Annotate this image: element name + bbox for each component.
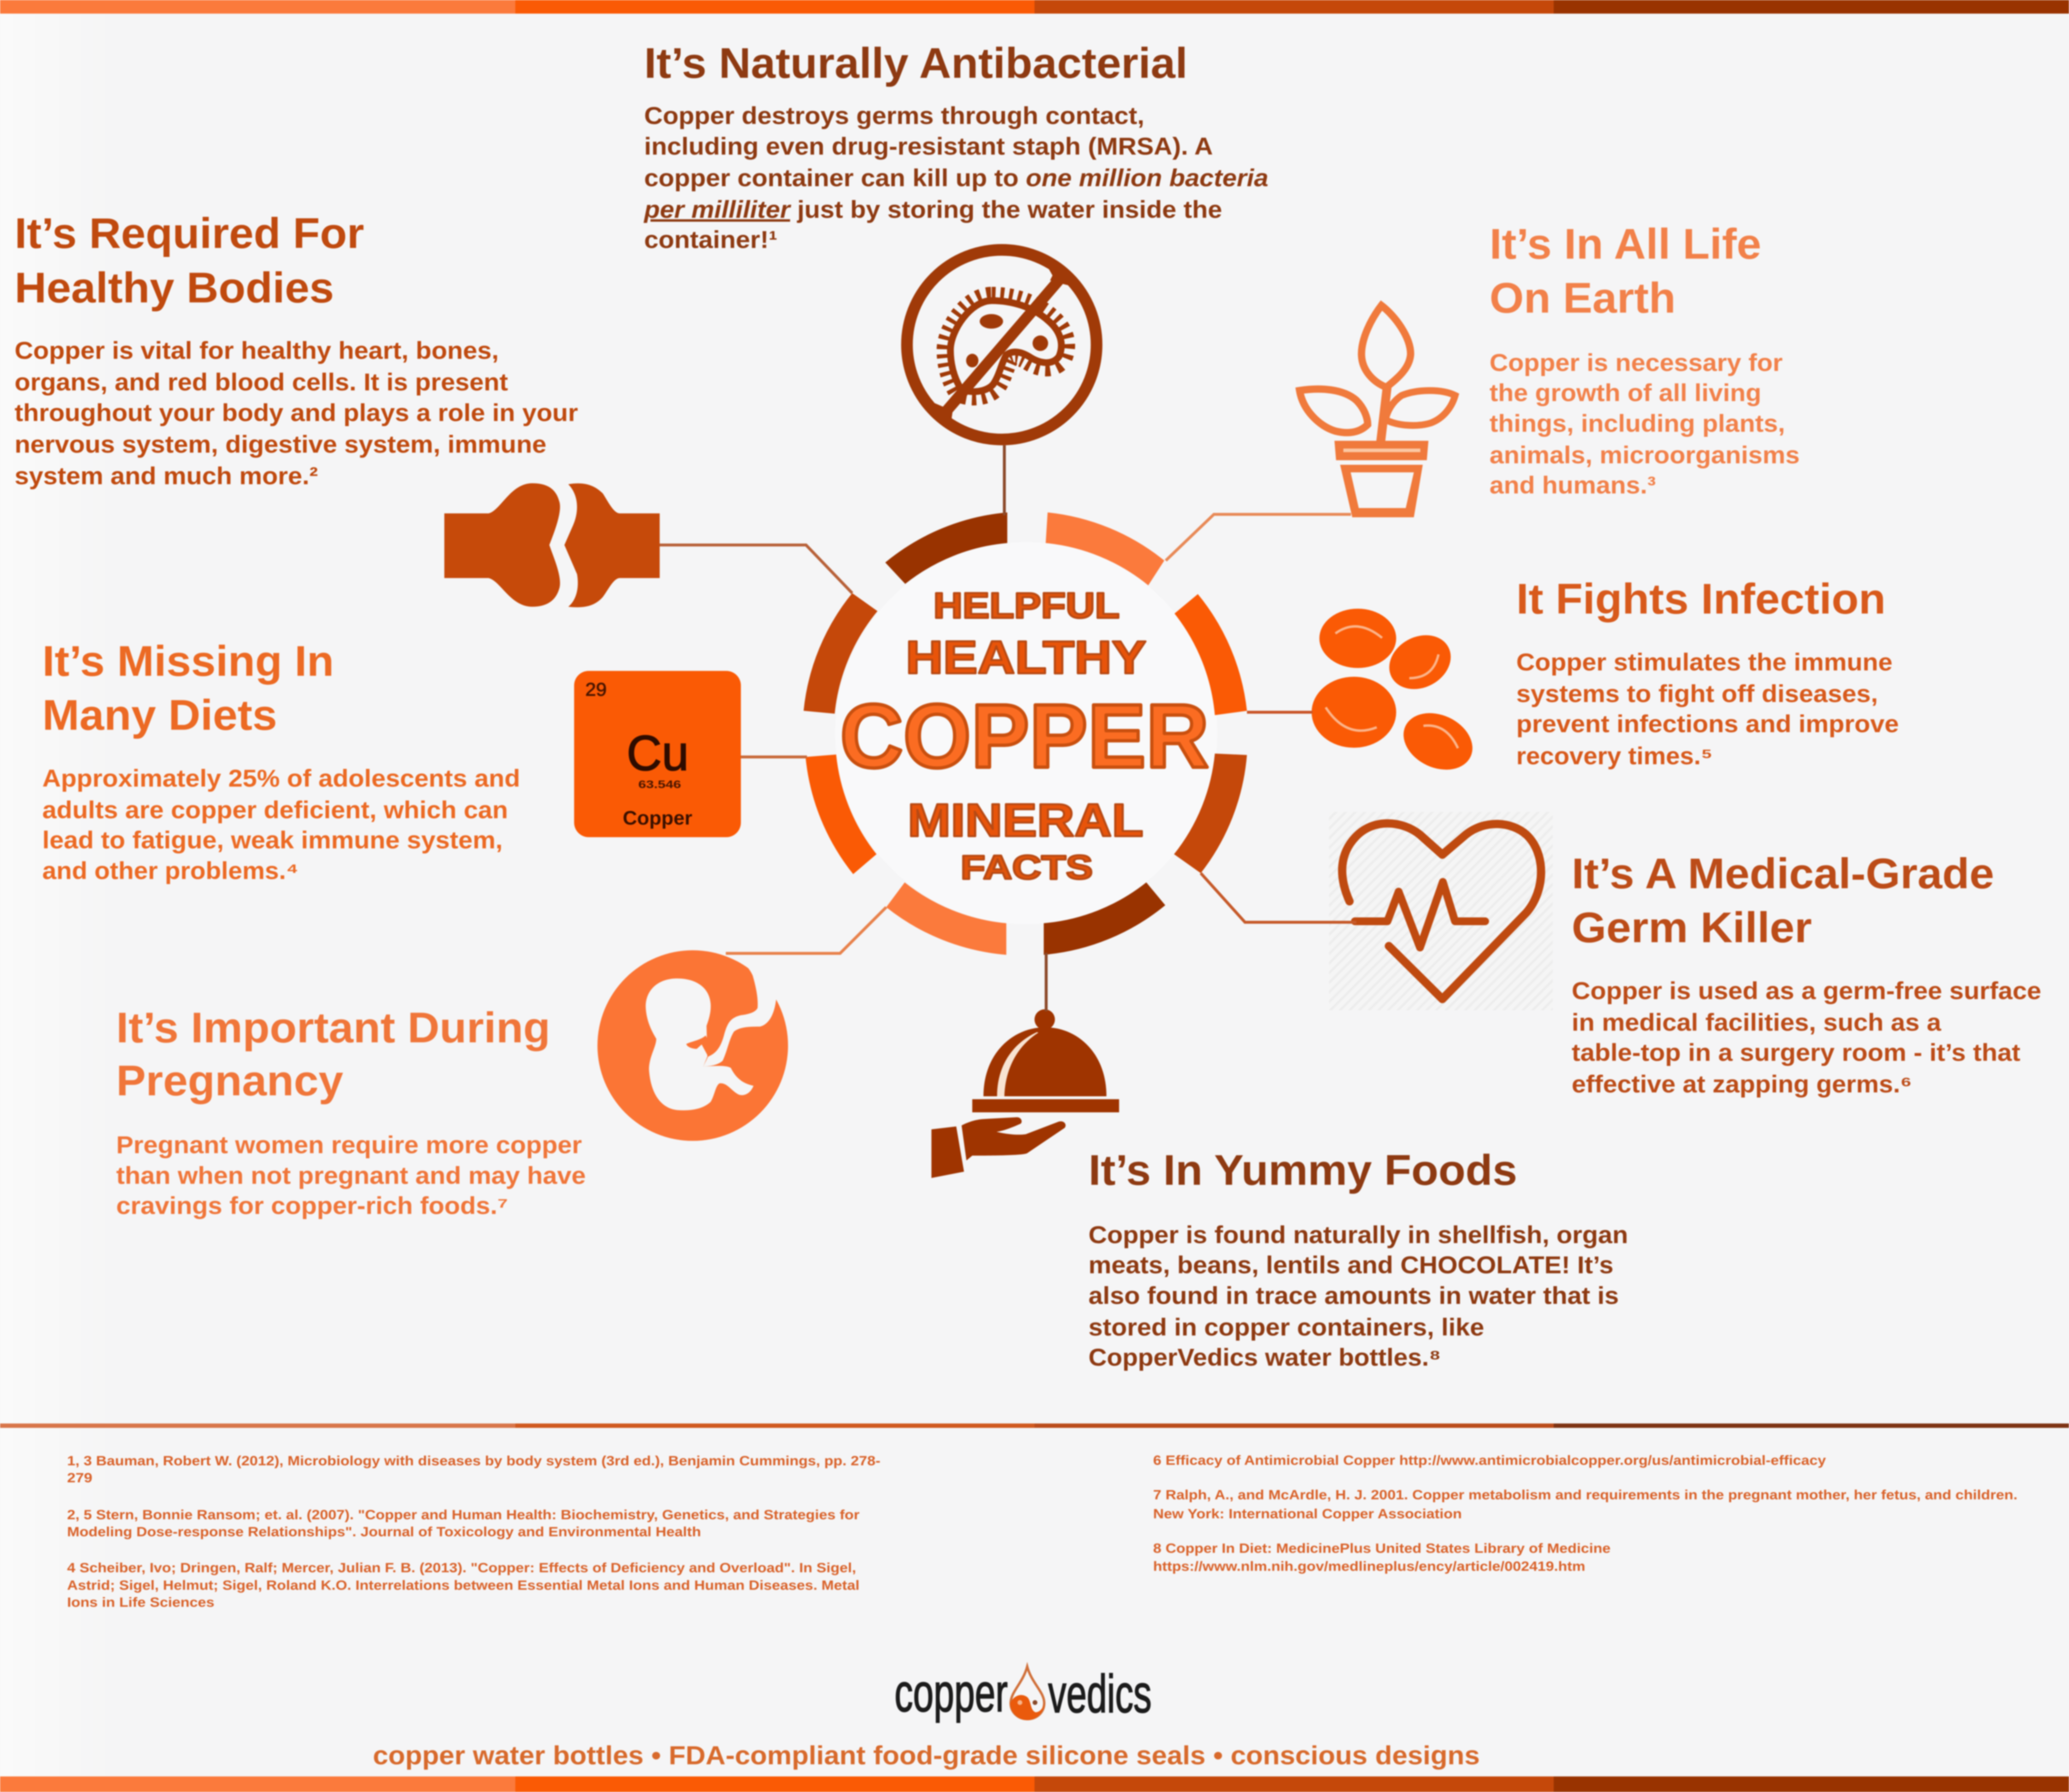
ring segment: bottom left	[886, 882, 1006, 955]
bacterium body	[950, 300, 1061, 392]
ring segment: right upper	[1175, 594, 1247, 715]
icon: periodic table tile for copper: Copper	[623, 808, 692, 829]
icon: serving dome on hand	[931, 1009, 1119, 1178]
bacterium nuclei	[980, 314, 1003, 329]
references right column: 6 Efficacy of Antimicrobial Copper http://www.antimicrobialcopper.org/us/antimicrobial-efficacy	[1153, 1453, 1826, 1468]
heading and text: naturally antibacterial: per milliliter just by storing the water inside the	[643, 196, 1222, 223]
logo: copper vedics	[894, 1663, 1152, 1724]
central title: COPPER	[840, 686, 1209, 787]
heading and text: in all life on earth	[1490, 220, 1800, 499]
heading and text: fights infection: prevent infections and improve	[1516, 710, 1899, 738]
heading and text: required for healthy bodies: system and much more.²	[15, 462, 318, 490]
references left column: 2, 5 Stern, Bonnie Ransom; et. al. (2007). "Copper and Human Health: Biochemistry, Genetics, and Strategies for	[67, 1507, 859, 1522]
heading and text: yummy foods: It’s In Yummy Foods	[1088, 1146, 1517, 1194]
icon: no bacteria	[907, 250, 1097, 439]
heading and text: fights infection: systems to fight off diseases,	[1516, 680, 1878, 707]
notch and umbilical cord	[703, 948, 797, 1066]
pot	[1334, 441, 1428, 517]
ring segment: right lower	[1174, 754, 1247, 873]
central title: HELPFUL	[933, 585, 1120, 626]
heading and text: naturally antibacterial: including even drug-resistant staph (MRSA). A	[644, 133, 1213, 160]
footer divider	[0, 1423, 2069, 1428]
heading and text: required for healthy bodies: nervous system, digestive system, immune	[15, 431, 546, 458]
tagline: copper water bottles • FDA-compliant food-grade silicone seals • conscious designs	[373, 1741, 1480, 1770]
heading and text: missing in many diets	[42, 637, 520, 884]
icon: bone joint	[444, 483, 660, 607]
heading and text: in all life on earth: On Earth	[1490, 274, 1676, 322]
references left column	[67, 1453, 880, 1610]
heading and text: important during pregnancy: cravings for copper-rich foods.⁷	[116, 1192, 508, 1219]
ring segment: left upper	[804, 593, 877, 714]
heading and text: medical-grade germ killer	[1572, 849, 2041, 1098]
references left column: Ions in Life Sciences	[67, 1595, 214, 1610]
heading and text: naturally antibacterial	[643, 39, 1268, 253]
heading and text: naturally antibacterial: copper container can kill up to one million bacteria	[644, 164, 1268, 192]
heading and text: naturally antibacterial: It’s Naturally Antibacterial	[644, 39, 1188, 87]
heading and text: yummy foods	[1088, 1146, 1628, 1371]
heading and text: fights infection: recovery times.⁵	[1516, 742, 1713, 770]
heading and text: in all life on earth: Copper is necessary for	[1490, 349, 1783, 376]
fetus mouth	[686, 1036, 708, 1055]
icon: copper drop	[1010, 1667, 1044, 1720]
icon: heart with pulse	[1329, 812, 1553, 1010]
heading and text: yummy foods: also found in trace amounts in water that is	[1088, 1282, 1619, 1309]
bottom colour bar	[0, 1776, 2069, 1792]
heading and text: missing in many diets: lead to fatigue, weak immune system,	[42, 826, 503, 854]
central title	[840, 585, 1209, 886]
icon: blood cells	[1312, 609, 1482, 780]
heading and text: important during pregnancy: It’s Important During	[116, 1003, 550, 1052]
heading and text: required for healthy bodies: Healthy Bodies	[15, 264, 334, 312]
references right column: https://www.nlm.nih.gov/medlineplus/ency/article/002419.htm	[1153, 1559, 1585, 1574]
heading and text: important during pregnancy: Pregnant women require more copper	[116, 1131, 582, 1159]
heading and text: in all life on earth: It’s In All Life	[1490, 220, 1761, 268]
heading and text: naturally antibacterial: container!¹	[644, 226, 777, 253]
heading and text: medical-grade germ killer: Germ Killer	[1572, 903, 1812, 951]
central ring	[804, 512, 1247, 955]
references left column: Astrid; Sigel, Helmut; Sigel, Roland K.O. Interrelations between Essential Metal Ions and Human Diseases. Metal	[67, 1578, 859, 1593]
central title: FACTS	[961, 848, 1093, 886]
references right column: 7 Ralph, A., and McArdle, H. J. 2001. Copper metabolism and requirements in the pregnant mother, her fetus, and children.	[1153, 1487, 2017, 1502]
icon: periodic table tile for copper: 63.546	[638, 778, 681, 791]
heading and text: yummy foods: meats, beans, lentils and CHOCOLATE! It’s	[1088, 1251, 1613, 1279]
icon: periodic table tile for copper: 29	[585, 680, 607, 700]
heading and text: required for healthy bodies: It’s Required For	[15, 209, 364, 257]
heading and text: required for healthy bodies: Copper is vital for healthy heart, bones,	[15, 337, 499, 364]
logo: copper vedics: vedics	[1048, 1664, 1152, 1724]
icon: fetus	[597, 948, 797, 1141]
heading and text: missing in many diets: adults are copper deficient, which can	[42, 796, 508, 824]
bacterium spikes	[950, 300, 1061, 392]
references right column: New York: International Copper Association	[1153, 1506, 1462, 1521]
fetus silhouette	[646, 979, 754, 1110]
references left column: Modeling Dose-response Relationships". Journal of Toxicology and Environmental Health	[67, 1524, 701, 1539]
connector lines	[660, 445, 1356, 1011]
heading and text: yummy foods: Copper is found naturally in shellfish, organ	[1088, 1221, 1628, 1248]
heading and text: medical-grade germ killer: in medical facilities, such as a	[1572, 1009, 1942, 1036]
heading and text: fights infection: Copper stimulates the immune	[1516, 649, 1893, 676]
heading and text: in all life on earth: and humans.³	[1490, 472, 1656, 499]
heading and text: important during pregnancy	[116, 1003, 586, 1219]
ring segment: left lower	[806, 755, 877, 874]
heading and text: important during pregnancy: Pregnancy	[116, 1056, 343, 1105]
heading and text: missing in many diets: It’s Missing In	[42, 637, 334, 685]
heading and text: in all life on earth: animals, microorganisms	[1490, 441, 1800, 469]
heading and text: medical-grade germ killer: It’s A Medical-Grade	[1572, 849, 1994, 897]
heading and text: required for healthy bodies: throughout your body and plays a role in your	[15, 399, 578, 426]
heading and text: naturally antibacterial: Copper destroys germs through contact,	[644, 102, 1144, 129]
heading and text: medical-grade germ killer: Copper is used as a germ-free surface	[1572, 977, 2041, 1004]
prohibition circle and slash	[907, 250, 1097, 439]
references left column: 279	[67, 1470, 92, 1485]
heading and text: required for healthy bodies: organs, and red blood cells. It is present	[15, 369, 508, 396]
heading and text: yummy foods: CopperVedics water bottles.⁸	[1088, 1344, 1441, 1371]
heading and text: in all life on earth: things, including plants,	[1490, 410, 1785, 437]
logo: copper vedics: copper	[894, 1663, 1008, 1723]
ring segment: top right	[1046, 512, 1164, 585]
central title: HEALTHY	[906, 632, 1146, 684]
references left column: 4 Scheiber, Ivo; Dringen, Ralf; Mercer, Julian F. B. (2013). "Copper: Effects of Deficiency and Overload". In Sigel,	[67, 1560, 856, 1575]
references right column: 8 Copper In Diet: MedicinePlus United States Library of Medicine	[1153, 1541, 1611, 1556]
references left column: 1, 3 Bauman, Robert W. (2012), Microbiology with diseases by body system (3rd ed.), Benjamin Cummings, pp. 278-	[67, 1453, 880, 1468]
icon: periodic table tile for copper: Cu	[627, 725, 689, 781]
heading and text: missing in many diets: Approximately 25% of adolescents and	[42, 765, 520, 792]
heading and text: missing in many diets: Many Diets	[42, 691, 277, 739]
top colour bar	[0, 0, 2069, 14]
heading and text: in all life on earth: the growth of all living	[1490, 379, 1761, 406]
heading and text: yummy foods: stored in copper containers, like	[1088, 1314, 1484, 1341]
heading and text: medical-grade germ killer: effective at zapping germs.⁶	[1572, 1071, 1912, 1098]
central title: MINERAL	[908, 794, 1143, 846]
heading and text: fights infection	[1516, 575, 1899, 770]
ring segment: bottom right	[1044, 882, 1165, 955]
icon: plant	[1299, 305, 1455, 517]
ring segment: top left	[885, 512, 1007, 584]
references right column	[1153, 1453, 2017, 1574]
heading and text: fights infection: It Fights Infection	[1516, 575, 1886, 623]
icon: periodic table tile for copper	[574, 671, 741, 837]
heading and text: required for healthy bodies	[15, 209, 578, 490]
heading and text: missing in many diets: and other problems.⁴	[42, 857, 298, 884]
heading and text: medical-grade germ killer: table-top in a surgery room - it’s that	[1572, 1039, 2020, 1066]
heading and text: important during pregnancy: than when not pregnant and may have	[116, 1162, 586, 1189]
